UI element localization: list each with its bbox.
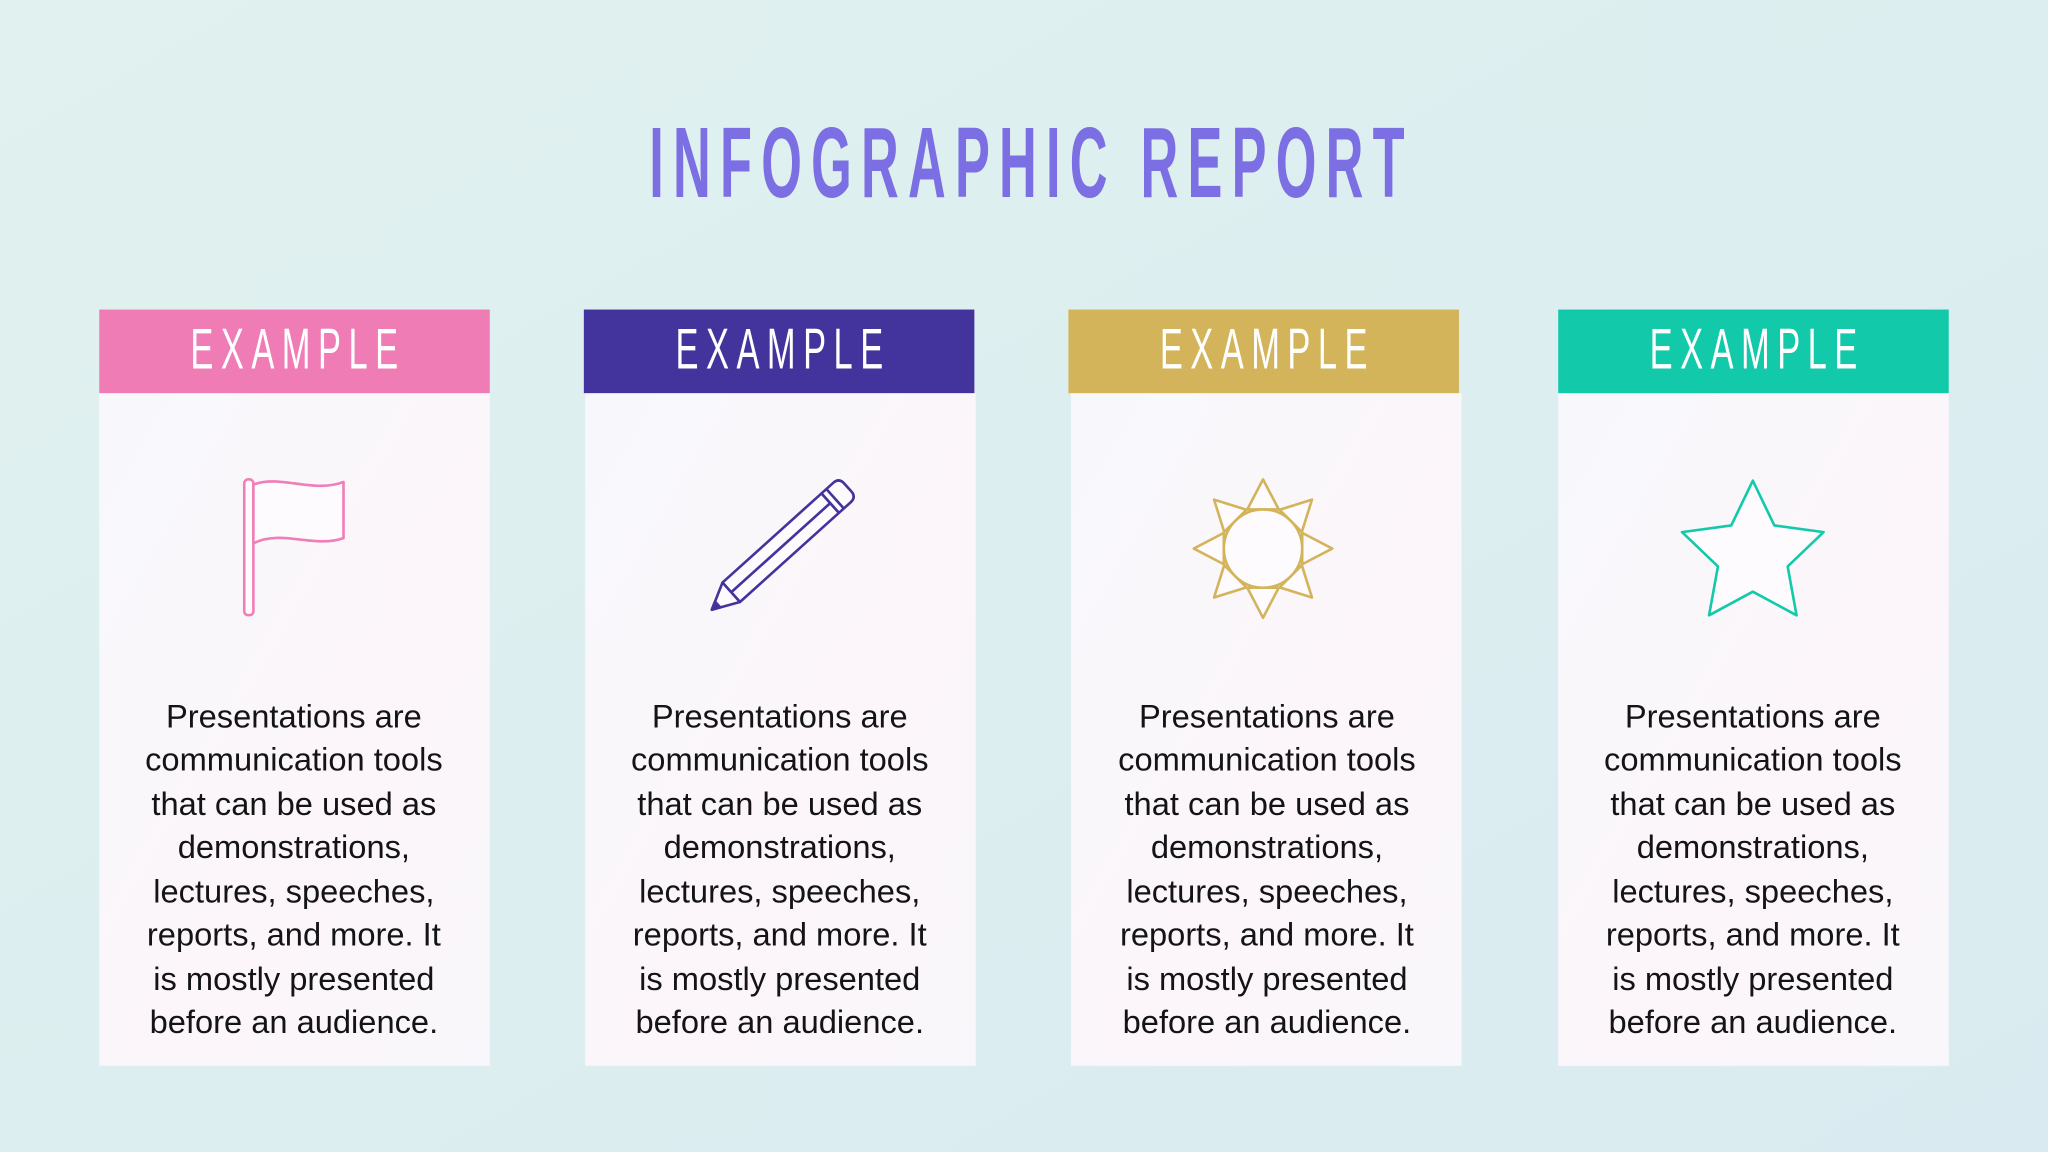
panel: card 3	[1068, 310, 1462, 1066]
text block: card 1: is mostly presented	[153, 960, 434, 997]
header: card 4	[1558, 310, 1949, 393]
text block: card 2: demonstrations,	[664, 828, 896, 865]
text block: card 3: is mostly presented	[1126, 960, 1408, 997]
text block: card 2: before an audience.	[635, 1003, 924, 1040]
text block: card 2	[631, 698, 929, 1040]
header: card 3: EXAMPLE	[1160, 317, 1368, 382]
icon: pencil	[703, 478, 856, 619]
text block: card 4: demonstrations,	[1637, 828, 1869, 865]
title: INFOGRAPHIC REPORT	[649, 106, 1405, 219]
header: card 3	[1068, 310, 1459, 393]
text block: card 4: communication tools	[1604, 741, 1902, 778]
text block: card 1: that can be used as	[151, 785, 436, 822]
text block: card 2: that can be used as	[637, 785, 922, 822]
text block: card 4	[1604, 698, 1902, 1040]
text block: card 3: demonstrations,	[1151, 828, 1383, 865]
text block: card 3: that can be used as	[1124, 785, 1409, 822]
panel: card 4	[1558, 310, 1949, 1066]
text block: card 2: communication tools	[631, 741, 929, 778]
text block: card 1: lectures, speeches,	[153, 873, 434, 910]
text block: card 1: communication tools	[145, 741, 443, 778]
header: card 2	[584, 310, 974, 393]
text block: card 2: Presentations are	[652, 698, 908, 735]
text block: card 4: Presentations are	[1625, 698, 1881, 735]
text block: card 3: reports, and more. It	[1120, 916, 1414, 953]
panel: card 2	[584, 310, 976, 1066]
text block: card 3: Presentations are	[1139, 698, 1395, 735]
text block: card 2: reports, and more. It	[633, 916, 927, 953]
icon: flag	[244, 479, 344, 615]
text block: card 1	[145, 698, 443, 1040]
text block: card 3: lectures, speeches,	[1126, 873, 1408, 910]
text block: card 1: Presentations are	[166, 698, 422, 735]
text block: card 1: before an audience.	[150, 1003, 438, 1040]
text block: card 4: lectures, speeches,	[1612, 873, 1893, 910]
text block: card 3: communication tools	[1118, 741, 1416, 778]
text block: card 4: is mostly presented	[1612, 960, 1893, 997]
text block: card 1: reports, and more. It	[147, 916, 441, 953]
header: card 1	[99, 310, 490, 393]
text block: card 4: before an audience.	[1609, 1003, 1897, 1040]
panel: card 1	[99, 310, 490, 1066]
text block: card 4: reports, and more. It	[1606, 916, 1900, 953]
text block: card 2: is mostly presented	[639, 960, 920, 997]
icon: star	[1682, 481, 1824, 615]
header: card 1: EXAMPLE	[190, 317, 398, 382]
text block: card 3	[1118, 698, 1416, 1040]
text block: card 4: that can be used as	[1610, 785, 1895, 822]
text block: card 3: before an audience.	[1123, 1003, 1411, 1040]
header: card 2: EXAMPLE	[676, 317, 883, 382]
text block: card 1: demonstrations,	[178, 828, 410, 865]
header: card 4: EXAMPLE	[1650, 317, 1857, 382]
icon: sun	[1194, 479, 1332, 618]
text block: card 2: lectures, speeches,	[639, 873, 920, 910]
